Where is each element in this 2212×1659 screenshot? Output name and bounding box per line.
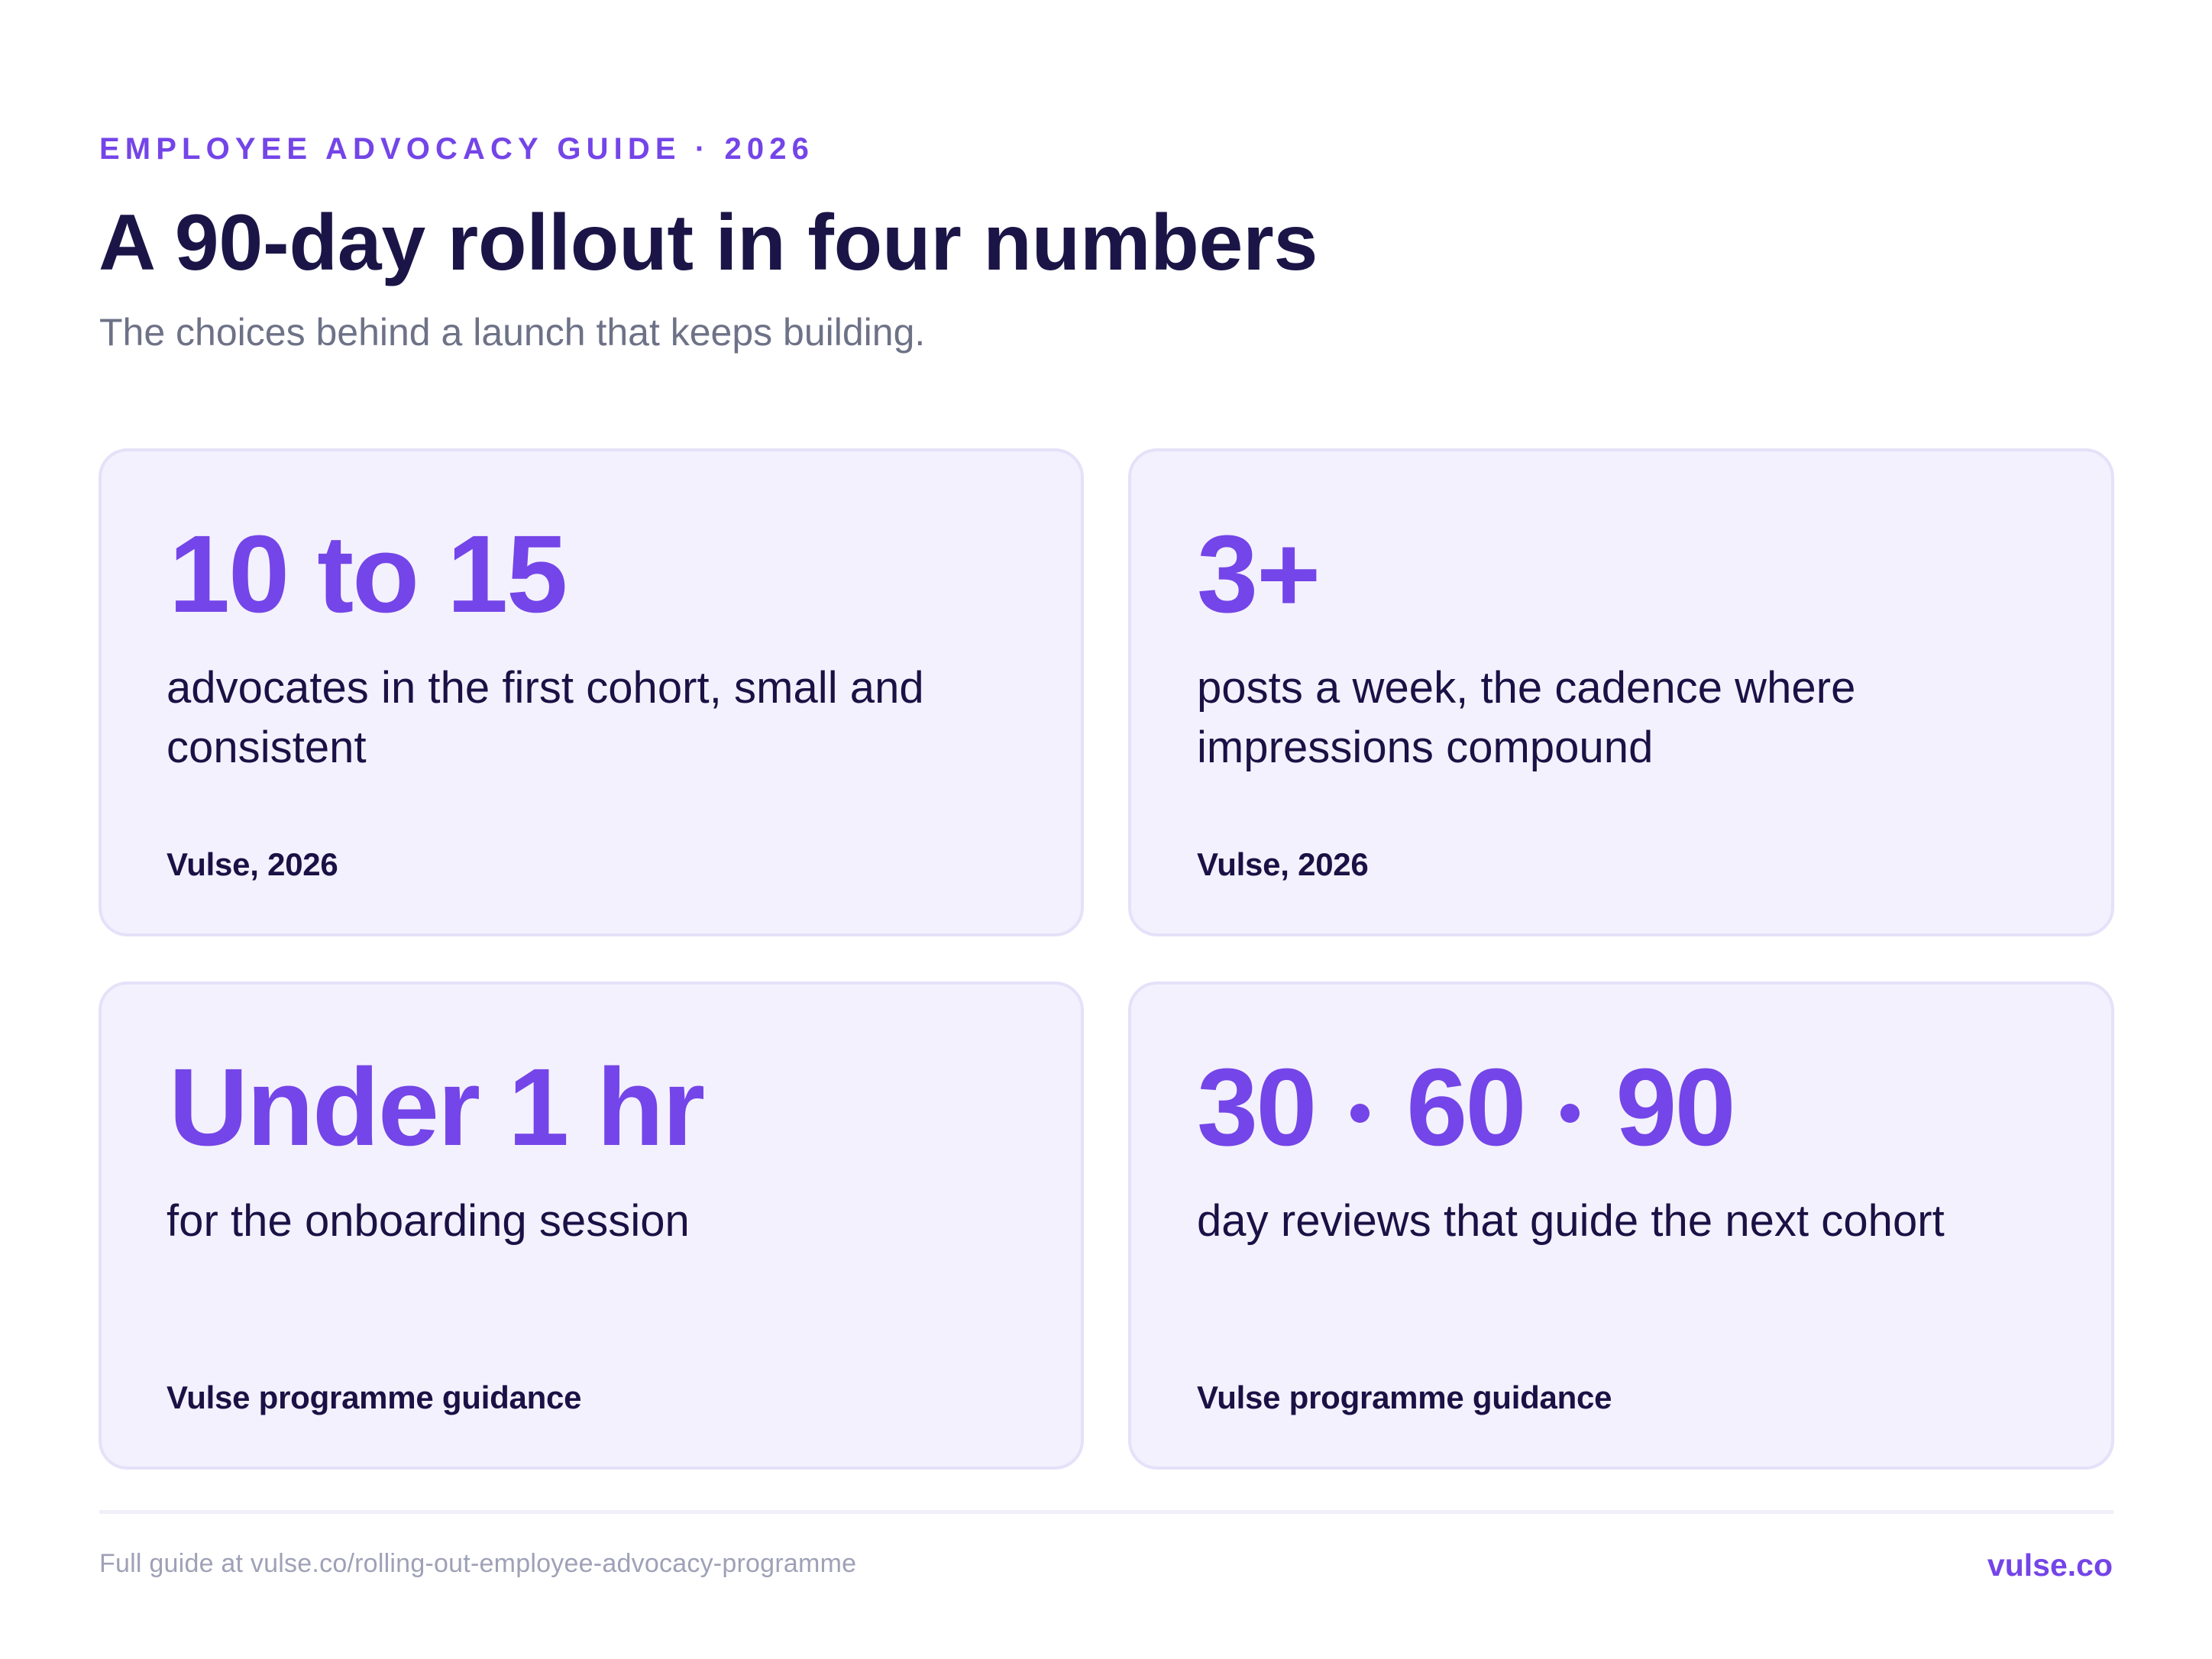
description: day reviews: day reviews that guide the next cohort (1197, 1196, 1945, 1246)
source: Vulse 2026: Vulse, 2026 (1197, 846, 1369, 882)
stat: 3+: 3+ (1197, 513, 1319, 635)
description: advocates: advocates in the first cohort, small and consistent (167, 663, 924, 772)
stat: 10 to 15: 10 to 15 (169, 513, 566, 635)
stat: Under 1 hr: Under 1 hr (169, 1046, 703, 1169)
source: programme guidance: Vulse programme guidance (1197, 1379, 1612, 1415)
eyebrow label: EMPLOYEE ADVOCACY GUIDE · 2026 (99, 132, 814, 166)
panel: onboarding session (99, 981, 1084, 1470)
source: programme guidance: Vulse programme guidance (167, 1379, 581, 1415)
footer brand: vulse.co (1987, 1547, 2113, 1583)
subtitle: The choices behind a launch that keeps building. (99, 311, 925, 354)
stat: 30 60 90: 30 · 60 · 90 (1197, 1046, 1734, 1169)
panel: posting cadence (1128, 448, 2114, 936)
title: A 90-day rollout in four numbers (99, 199, 1318, 287)
description: onboarding: for the onboarding session (167, 1196, 690, 1246)
description: posts a week: posts a week, the cadence where impressions compound (1197, 663, 1855, 772)
panel: first cohort size (99, 448, 1084, 936)
panel: review checkpoints (1128, 981, 2114, 1470)
footer link text: Full guide at vulse.co/rolling-out-employee-advocacy-programme (99, 1549, 856, 1578)
source: Vulse 2026: Vulse, 2026 (167, 846, 338, 882)
